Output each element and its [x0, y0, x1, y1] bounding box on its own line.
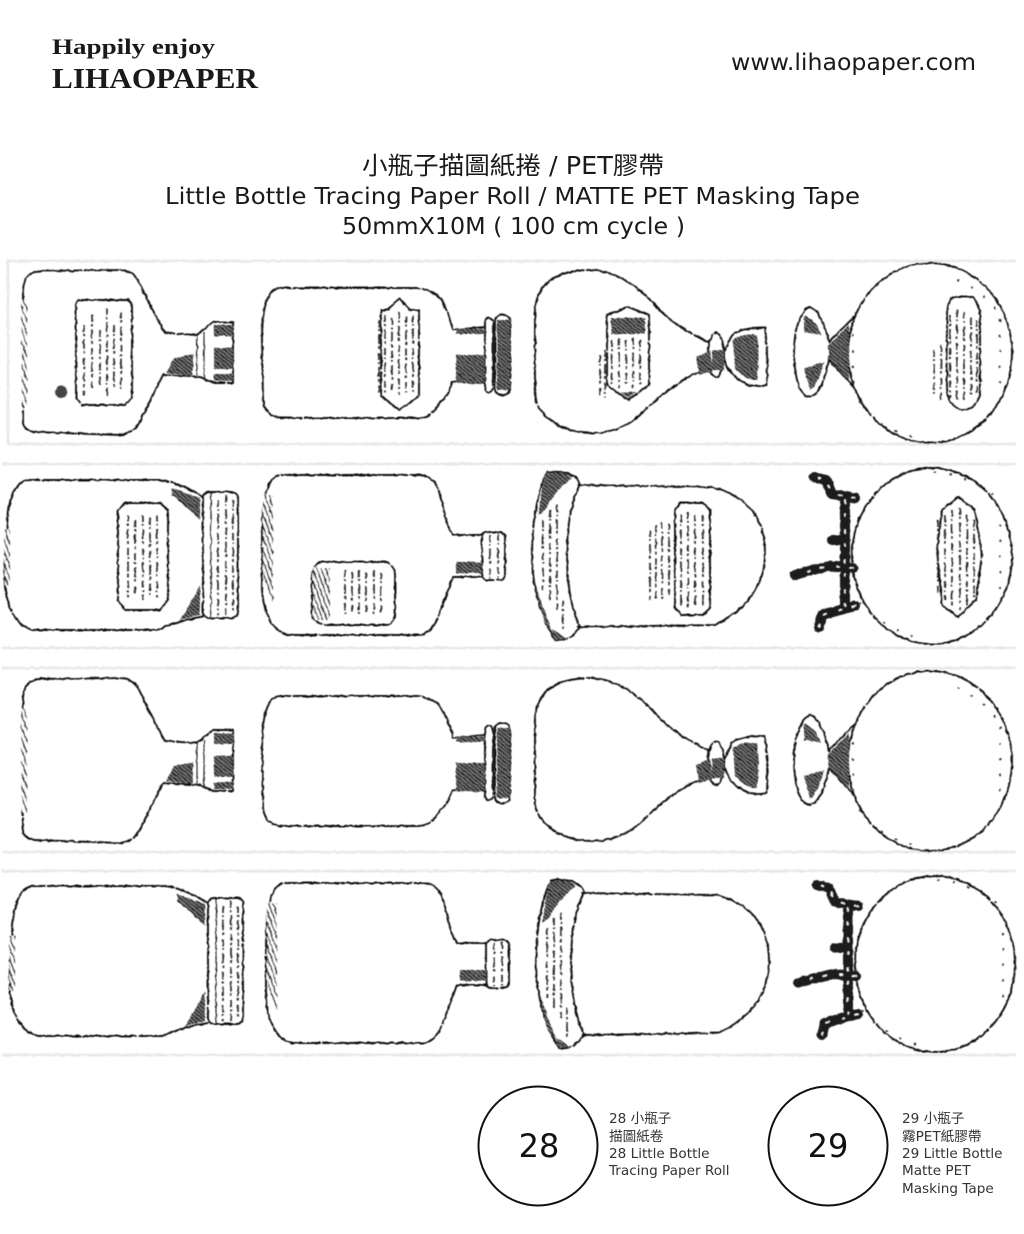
caption 28: Tracing Paper Roll: [608, 1163, 730, 1179]
option 29: [768, 1086, 1007, 1206]
number badge 28: [478, 1086, 598, 1206]
title: English: Little Bottle Tracing Paper Roll / MATTE PET Masking Tape: [165, 184, 860, 210]
brand name: LIHAOPAPER: [52, 63, 259, 95]
caption 28: 28 小瓶子: [609, 1111, 671, 1127]
tape strip 3: matte PET without labels: [2, 668, 1016, 852]
title: Chinese: 小瓶子描圖紙捲 / PET膠帶: [362, 151, 664, 180]
number badge 28: 28: [519, 1127, 559, 1165]
caption 28: 28 Little Bottle: [609, 1146, 710, 1162]
tape strip 2: tracing paper with labels: [2, 464, 1016, 648]
caption 29: 29 Little Bottle: [902, 1146, 1003, 1162]
caption 29: 霧PET紙膠帶: [902, 1129, 981, 1145]
tape strip 1: tracing paper with labels: [8, 261, 1016, 444]
caption 29: Matte PET: [902, 1163, 971, 1179]
header: brand: [52, 34, 259, 95]
number badge 29: [768, 1086, 888, 1206]
caption 29: 29 小瓶子: [902, 1111, 964, 1127]
option 28: [478, 1086, 730, 1206]
brand tagline: Happily enjoy: [52, 34, 215, 59]
caption 28: 描圖紙卷: [609, 1129, 664, 1145]
website url: www.lihaopaper.com: [731, 50, 976, 76]
title: size: 50mmX10M ( 100 cm cycle ): [342, 214, 685, 240]
caption 29: Masking Tape: [902, 1181, 994, 1197]
tape strip 4: matte PET without labels: [2, 871, 1016, 1055]
number badge 29: 29: [808, 1127, 848, 1165]
title block: [165, 151, 860, 240]
